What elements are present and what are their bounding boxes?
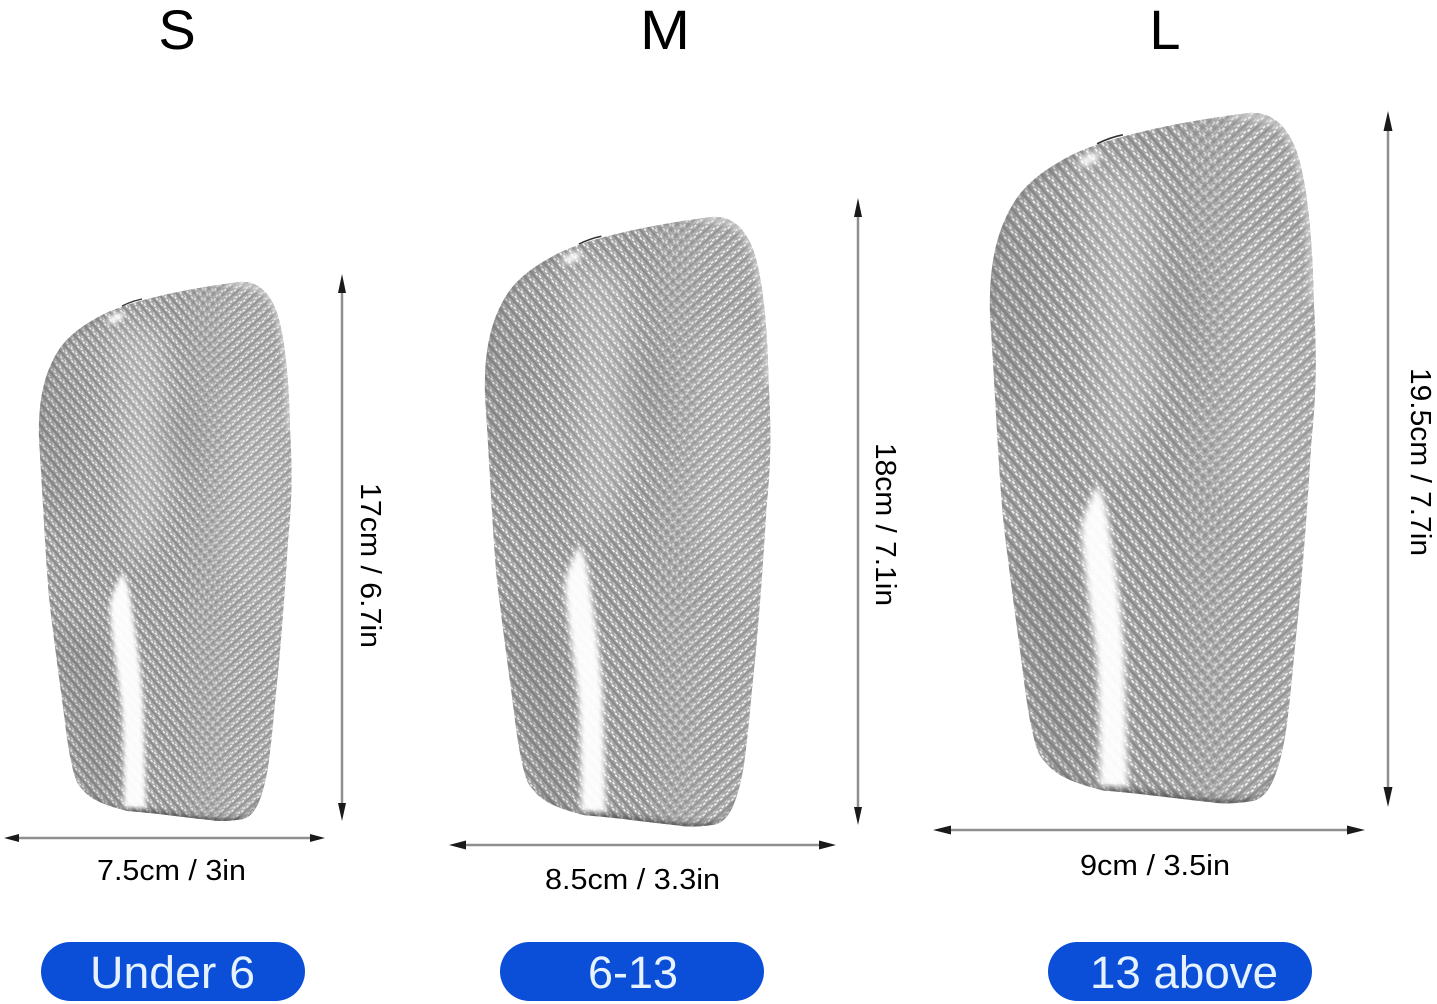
shin guard M [475,209,780,837]
arrow: M height [854,198,862,825]
dimension: S height: 17cm / 6.7in [354,483,386,648]
arrow: L height [1384,111,1392,807]
arrow: M width [449,840,836,850]
dimension: M height: 18cm / 7.1in [869,443,901,606]
dimension: L height: 19.5cm / 7.7in [1404,368,1436,556]
dimension: S width: 7.5cm / 3in [97,855,246,887]
arrow: S height [338,274,346,821]
pill: 13 above [1048,942,1312,1001]
pill: 13 above: 13 above [1090,947,1278,998]
dimension: M width: 8.5cm / 3.3in [545,864,720,896]
dimension: L width: 9cm / 3.5in [1080,850,1230,882]
pill: Under 6 [41,942,305,1001]
pill: Under 6: Under 6 [90,947,255,998]
arrow: L width [933,826,1365,834]
pill: 6-13 [500,942,764,1001]
shin guard S [30,275,300,830]
pill: 6-13: 6-13 [588,947,678,998]
arrow: S width [4,834,325,842]
shin guard L [978,104,1327,815]
